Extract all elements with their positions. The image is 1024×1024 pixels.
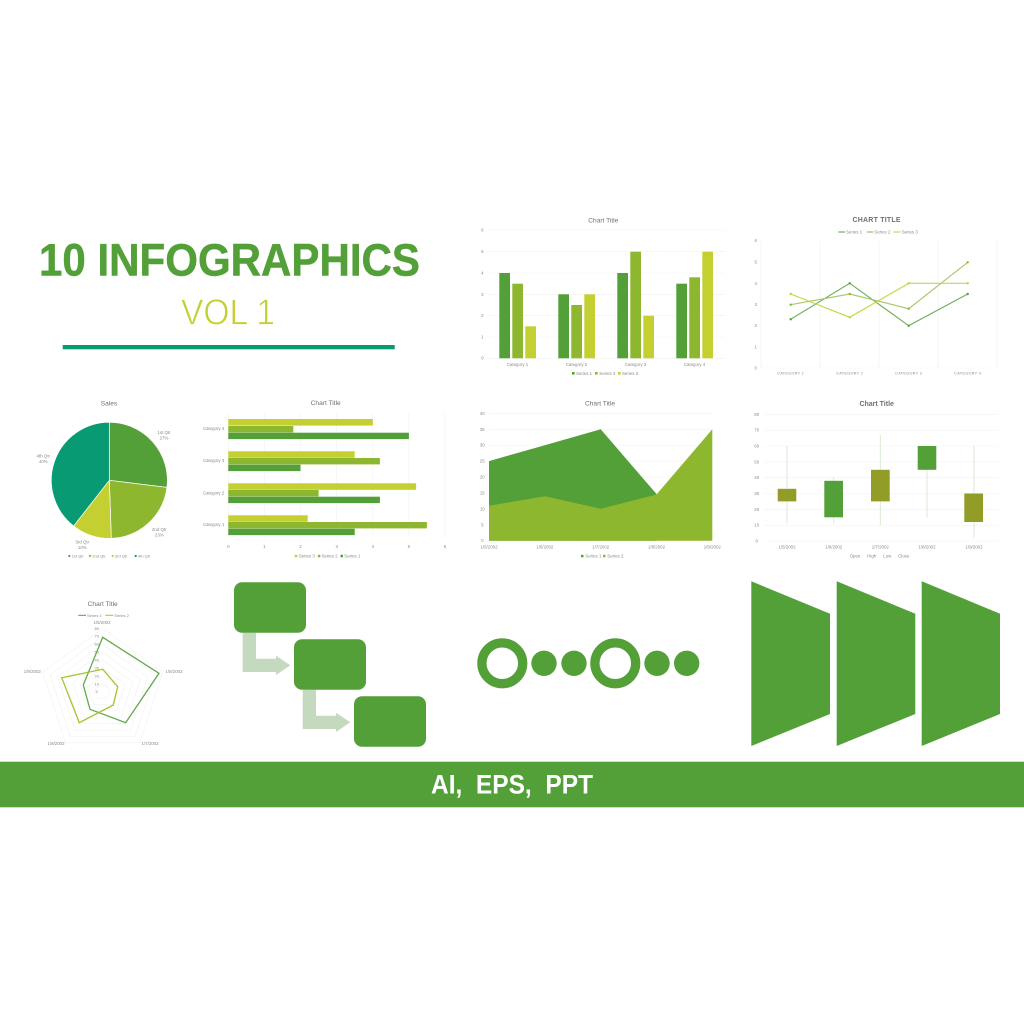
bar chart x axis labels: 1	[263, 544, 266, 549]
pie legend: 1st Qtr	[72, 554, 84, 558]
candlestick y axis labels: 0	[755, 538, 758, 544]
pie data labels: 4th Qtr	[37, 454, 51, 458]
radar axis labels: 1/9/2002	[24, 669, 41, 674]
candlestick x axis labels: 1/8/2002	[918, 544, 936, 550]
candlestick y axis labels	[754, 412, 760, 544]
candlestick y axis labels: 10	[754, 523, 760, 528]
step box 3	[354, 696, 426, 747]
bar chart legend: Series 2	[322, 554, 338, 558]
bar chart category labels: Category 2	[203, 490, 225, 496]
pie slice: 4th Qtr	[51, 422, 109, 526]
step arrow 1	[243, 633, 290, 675]
candlestick legend	[850, 554, 910, 558]
title underline	[63, 345, 395, 349]
area chart x axis labels: 1/6/2002	[536, 544, 554, 550]
candlestick y axis labels: 60	[754, 444, 760, 448]
column chart y axis labels: 0	[481, 356, 484, 360]
chart: candlestick	[754, 401, 998, 558]
pie data labels: 27%	[160, 436, 168, 440]
title: 10 Infographics: 10 INFOGRAPHICS	[39, 234, 420, 286]
dot 3	[644, 651, 670, 676]
radar chart title: Chart Title	[88, 601, 118, 608]
column chart legend: Series 2	[599, 371, 616, 376]
area chart x axis labels	[480, 544, 721, 550]
line series 2	[790, 261, 969, 310]
bar chart category labels	[203, 426, 225, 527]
bar chart x axis labels: 6	[444, 544, 447, 549]
column chart bars	[499, 252, 713, 358]
candlestick y axis labels: 20	[754, 507, 760, 512]
dot 4	[674, 651, 699, 676]
radar axis labels: 1/6/2002	[165, 669, 183, 674]
line chart y axis labels: 2	[754, 323, 757, 328]
column chart category labels: Category 3	[625, 362, 647, 367]
candlestick x axis labels: 1/5/2002	[778, 544, 796, 550]
pie slice: 3rd Qtr	[74, 480, 111, 538]
radar value labels: 0	[96, 689, 99, 694]
area series 2	[489, 429, 712, 541]
area chart y axis labels: 0	[481, 538, 484, 543]
bar chart category labels: Category 1	[203, 522, 225, 527]
area chart legend	[581, 554, 624, 558]
radar value labels: 20	[94, 674, 100, 678]
pie data labels: 2nd Qtr	[152, 527, 167, 532]
candlestick legend: Open	[850, 554, 861, 558]
line chart y axis labels: 5	[754, 260, 757, 264]
area chart y axis labels: 40	[480, 411, 485, 416]
bar chart title: Chart Title	[311, 400, 341, 407]
chart: clustered column	[481, 218, 725, 376]
pie slice: 1st Qtr	[109, 422, 167, 487]
radar value labels: 60	[94, 642, 100, 647]
area chart y axis labels	[480, 411, 485, 543]
line chart category labels: CATEGORY 4	[954, 372, 981, 376]
pie data labels: 1st Qtr	[157, 430, 171, 435]
area chart x axis labels: 1/5/2002	[480, 544, 498, 550]
area chart y axis labels: 25	[480, 459, 485, 464]
trapezoid 1	[751, 581, 830, 746]
dot 2	[561, 651, 587, 676]
line series 3	[790, 282, 969, 318]
radar legend: Series 2	[114, 613, 130, 618]
chart: horizontal bars	[203, 400, 447, 558]
column chart y axis labels: 5	[481, 249, 484, 254]
radar legend	[78, 613, 130, 618]
bar chart legend	[295, 554, 361, 558]
radar value labels: 70	[94, 634, 100, 639]
trapezoid 2	[837, 581, 915, 746]
pie legend: 4th Qtr	[138, 554, 151, 558]
line chart legend	[838, 230, 918, 234]
column chart category labels: Category 2	[566, 362, 588, 367]
area chart x axis labels: 1/9/2002	[704, 544, 721, 550]
column chart legend	[572, 371, 639, 376]
bar chart legend: Series 3	[299, 554, 315, 558]
area chart legend: Series 2	[607, 554, 624, 558]
candlestick x axis labels	[778, 544, 983, 550]
step box 2	[294, 639, 366, 690]
area chart x axis labels: 1/8/2002	[648, 544, 666, 550]
trapezoid 3	[922, 581, 1000, 746]
diagram: trapezoid funnel row	[751, 581, 1000, 746]
pie slice: 2nd Qtr	[109, 480, 167, 538]
pie legend: 2nd Qtr	[92, 554, 106, 558]
line chart category labels: CATEGORY 3	[895, 372, 922, 376]
candlestick y axis labels: 30	[754, 491, 760, 496]
ring 2	[595, 643, 636, 684]
area chart y axis labels: 35	[480, 427, 485, 432]
diagram: stepped process	[234, 582, 426, 747]
area series 1	[489, 429, 656, 541]
bar chart x axis labels: 0	[227, 544, 230, 549]
candlestick y axis labels: 80	[754, 412, 760, 417]
radar value labels: 50	[94, 650, 100, 654]
column chart y axis labels: 4	[481, 270, 484, 276]
step box 1	[234, 582, 306, 633]
column chart title: Chart Title	[588, 218, 619, 224]
radar axis labels: 1/7/2002	[141, 741, 159, 746]
line chart legend: Series 2	[874, 230, 891, 234]
line chart y axis labels: 0	[754, 366, 757, 370]
chart: area	[480, 400, 721, 558]
radar value labels: 80	[94, 626, 100, 631]
column chart y axis labels: 6	[481, 228, 484, 232]
line chart legend: Series 3	[902, 230, 918, 234]
candlestick legend: High	[867, 554, 877, 558]
radar axis labels	[24, 620, 183, 746]
bar chart legend: Series 1	[344, 554, 361, 558]
pie legend	[68, 554, 151, 558]
line chart y axis labels	[754, 238, 757, 370]
bar chart category labels: Category 3	[203, 458, 225, 463]
pie data labels: 40%	[39, 459, 48, 464]
line series 1	[790, 282, 969, 327]
line chart y axis labels: 3	[754, 302, 757, 307]
column chart legend: Series 1	[576, 371, 593, 376]
bar chart x axis labels: 3	[335, 544, 338, 549]
chart: line	[754, 217, 997, 376]
line chart title: CHART TITLE	[852, 217, 901, 224]
area chart y axis labels: 15	[480, 490, 485, 496]
radar series 2	[62, 669, 118, 723]
candlestick y axis labels: 40	[754, 475, 760, 480]
column chart y axis labels: 1	[481, 334, 484, 340]
column chart y axis labels: 3	[481, 292, 484, 297]
candlestick x axis labels: 1/6/2002	[825, 544, 843, 550]
area chart y axis labels: 20	[480, 474, 485, 480]
candlestick x axis labels: 1/9/2002	[965, 544, 983, 550]
candlestick wicks	[787, 435, 974, 538]
area chart x axis labels: 1/7/2002	[592, 544, 610, 550]
line chart legend: Series 1	[846, 230, 863, 234]
radar legend: Series 1	[87, 613, 102, 618]
column chart category labels: Category 4	[684, 362, 706, 367]
area chart y axis labels: 5	[481, 522, 484, 527]
candlestick x axis labels: 1/7/2002	[872, 544, 889, 550]
step arrow 2	[303, 690, 350, 732]
line chart category labels: CATEGORY 2	[836, 372, 863, 376]
pie legend: 3rd Qtr	[115, 554, 128, 558]
dot 1	[531, 651, 557, 676]
bar chart x axis labels: 5	[408, 544, 411, 549]
line chart y axis labels: 1	[754, 344, 757, 350]
area chart legend: Series 1	[585, 554, 602, 558]
candlestick legend: Low	[883, 554, 892, 558]
line chart category labels	[777, 372, 981, 376]
bar chart x axis labels	[227, 544, 447, 549]
line chart y axis labels: 4	[754, 281, 757, 286]
candlestick bodies	[778, 446, 983, 522]
column chart y axis labels	[481, 228, 484, 360]
pie data labels: 10%	[78, 545, 87, 550]
area chart y axis labels: 10	[480, 506, 485, 511]
candlestick chart title: Chart Title	[859, 401, 894, 408]
column chart y axis labels: 2	[481, 313, 484, 318]
footer band	[0, 762, 1024, 807]
column chart category labels: Category 1	[507, 362, 529, 367]
bar chart x axis labels: 2	[299, 544, 302, 549]
pie data labels: 23%	[155, 532, 164, 538]
chart: radar	[24, 601, 183, 746]
area chart y axis labels: 30	[480, 443, 485, 448]
bar chart x axis labels: 4	[372, 544, 375, 549]
column chart legend: Series 3	[622, 371, 639, 376]
radar value labels: 30	[94, 666, 100, 670]
radar value labels	[94, 626, 100, 694]
diagram: circles row	[482, 643, 699, 684]
subtitle: Vol 1: VOL 1	[181, 292, 275, 332]
candlestick y axis labels: 50	[754, 459, 760, 464]
line chart y axis labels: 6	[754, 238, 757, 243]
candlestick y axis labels: 70	[754, 428, 760, 433]
pie data labels	[37, 430, 171, 550]
radar value labels: 10	[94, 682, 100, 686]
chart: pie sales	[37, 400, 171, 558]
candlestick legend: Close	[898, 554, 910, 558]
pie title: Sales	[101, 400, 118, 408]
radar value labels: 40	[94, 658, 100, 662]
radar axis labels: 1/8/2002	[47, 741, 65, 746]
bar chart category labels: Category 4	[203, 426, 225, 431]
radar series 1	[83, 637, 159, 723]
area chart title: Chart Title	[585, 400, 615, 408]
ring 1	[482, 643, 523, 684]
column chart category labels	[507, 362, 706, 367]
footer text: file formats: AI, EPS, PPT	[431, 770, 593, 800]
line chart category labels: CATEGORY 1	[777, 372, 804, 376]
radar axis labels: 1/5/2002	[93, 620, 111, 625]
pie data labels: 3rd Qtr	[75, 540, 90, 544]
bar chart bars	[228, 419, 427, 535]
